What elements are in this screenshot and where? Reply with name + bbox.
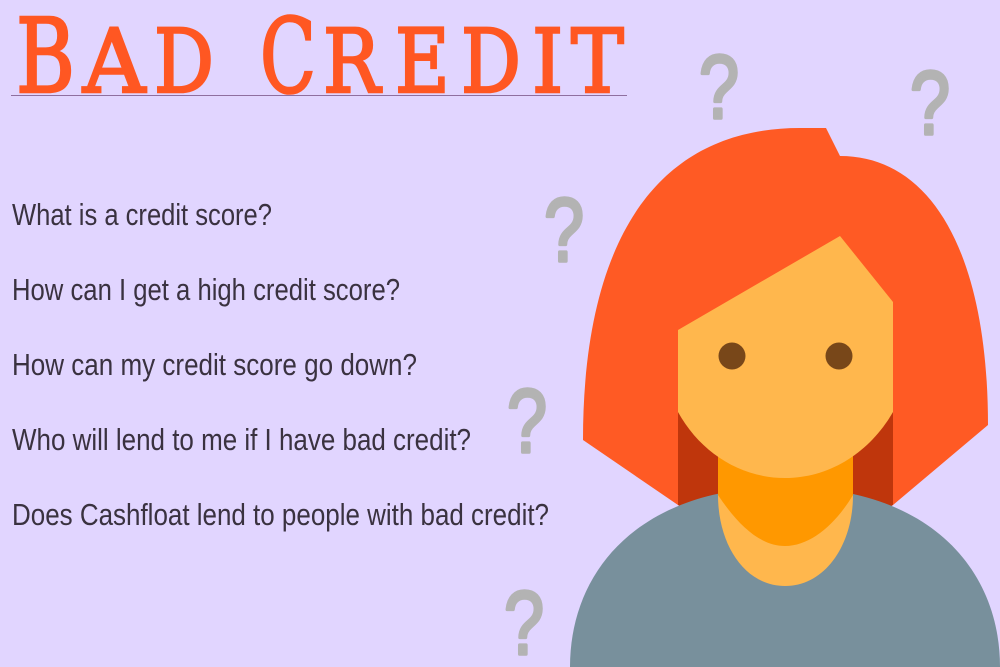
left eye [718, 342, 746, 370]
title: C [260, 0, 316, 117]
title: D [461, 11, 521, 114]
question 5: Does Cashfloat lend to people with bad credit? [12, 497, 549, 532]
title: T [571, 10, 624, 113]
question 4: Who will lend to me if I have bad credit? [12, 422, 471, 457]
title: R [323, 12, 382, 113]
title: E [395, 11, 450, 114]
title: A [82, 10, 146, 113]
icon: question mark middle: ? [544, 180, 584, 281]
neck [718, 455, 853, 586]
icon: question mark top right: ? [910, 53, 950, 154]
question 3: How can my credit score go down? [12, 347, 417, 382]
title: D [154, 11, 214, 114]
question 2: How can I get a high credit score? [12, 272, 400, 307]
icon: question mark lower: ? [507, 371, 547, 472]
right eye [826, 342, 852, 370]
hair shadow behind neck [678, 412, 893, 530]
face [678, 236, 893, 478]
title: I [532, 10, 563, 113]
illustration: woman with red hair [570, 128, 1000, 667]
question 1: What is a credit score? [12, 197, 272, 232]
title [16, 0, 624, 117]
questions list [12, 197, 549, 532]
title underline [11, 95, 627, 96]
shirt [570, 487, 1000, 667]
floating question marks [504, 37, 950, 667]
icon: question mark top: ? [699, 37, 739, 138]
neck shadow [718, 455, 853, 546]
hair [583, 128, 988, 505]
